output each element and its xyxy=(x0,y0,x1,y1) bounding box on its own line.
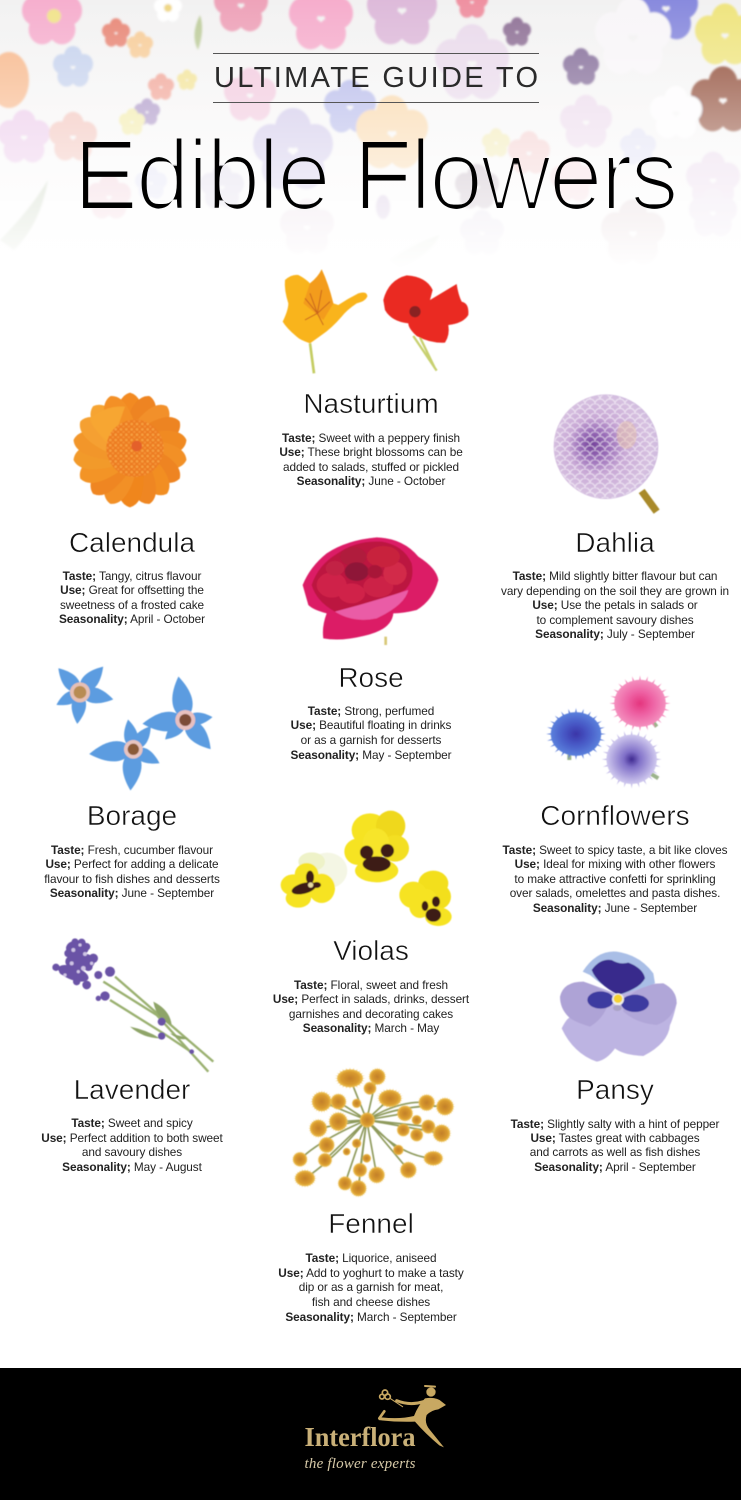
heading: borage: Borage xyxy=(87,800,177,831)
panel: calendula xyxy=(59,391,205,626)
text block: dahlia details: to complement savoury dishes xyxy=(536,613,694,627)
text block: lavender details: Use; Perfect addition to both sweet xyxy=(41,1131,224,1145)
text block: cornflowers details: to make attractive confetti for sprinkling xyxy=(514,872,716,886)
icon: cornflowers xyxy=(546,675,671,789)
text block: rose details: Seasonality; May - September xyxy=(290,748,452,762)
text block: rose details: Use; Beautiful floating in drinks xyxy=(291,718,452,732)
text block: lavender details xyxy=(41,1116,224,1174)
text block: nasturtium details: added to salads, stuffed or pickled xyxy=(283,460,459,474)
text block: dahlia details xyxy=(501,569,729,641)
heading: calendula: Calendula xyxy=(69,527,195,558)
panel: lavender xyxy=(41,938,224,1174)
text block: fennel details: Taste; Liquorice, aniseed xyxy=(306,1251,436,1265)
text block: fennel details: Seasonality; March - September xyxy=(285,1310,457,1324)
text block: dahlia details: Use; Use the petals in salads or xyxy=(532,598,698,612)
text block: lavender details: Taste; Sweet and spicy xyxy=(71,1116,193,1130)
panel: violas xyxy=(273,811,470,1035)
text block: lavender details: and savoury dishes xyxy=(82,1145,182,1159)
title: edible flowers: Edible Flowers xyxy=(73,120,679,230)
heading: cornflowers: Cornflowers xyxy=(540,800,690,831)
text block: fennel details: Use; Add to yoghurt to make a tasty xyxy=(278,1266,464,1280)
heading: lavender: Lavender xyxy=(74,1074,190,1105)
panel: nasturtium xyxy=(279,269,468,488)
text block: pansy details: Use; Tastes great with cabbages xyxy=(530,1131,700,1145)
text block: calendula details: Seasonality; April - October xyxy=(59,612,205,626)
text block: pansy details: Seasonality; April - September xyxy=(534,1160,696,1174)
panel: pansy xyxy=(511,952,720,1174)
logo: running figure with bouquet xyxy=(378,1386,446,1447)
heading: ultimate guide to: ULTIMATE GUIDE TO xyxy=(214,62,538,94)
heading: pansy: Pansy xyxy=(576,1074,654,1105)
text block: calendula details: Use; Great for offsetting the xyxy=(60,583,204,597)
icon: fennel flower head xyxy=(292,1067,455,1198)
text block: cornflowers details: Use; Ideal for mixing with other flowers xyxy=(515,857,716,871)
panel: dahlia xyxy=(501,394,729,641)
footer band xyxy=(0,1368,741,1500)
text block: calendula details: Taste; Tangy, citrus flavour xyxy=(63,569,202,583)
text block: violas details: Use; Perfect in salads, drinks, dessert xyxy=(273,992,470,1006)
text block: cornflowers details: Taste; Sweet to spicy taste, a bit like cloves xyxy=(503,843,728,857)
icon: nasturtium flowers xyxy=(283,269,468,373)
heading: dahlia: Dahlia xyxy=(575,527,655,558)
logo: tagline: the flower experts xyxy=(304,1456,416,1472)
icon: lavender sprigs xyxy=(52,938,213,1072)
panel: fennel xyxy=(278,1067,464,1324)
text block: violas details: Taste; Floral, sweet and fresh xyxy=(294,978,448,992)
panel: rose xyxy=(290,537,452,762)
icon: dahlia flower xyxy=(554,394,658,512)
title rule bottom xyxy=(213,102,539,103)
text block: calendula details: sweetness of a frosted cake xyxy=(60,598,205,612)
text block: fennel details: fish and cheese dishes xyxy=(312,1295,430,1309)
text block: lavender details: Seasonality; May - August xyxy=(62,1160,203,1174)
text block: nasturtium details: Taste; Sweet with a peppery finish xyxy=(282,431,460,445)
text block: nasturtium details xyxy=(279,431,463,488)
text block: borage details: Use; Perfect for adding a delicate xyxy=(45,857,219,871)
text block: calendula details xyxy=(59,569,205,626)
text block: borage details: flavour to fish dishes and desserts xyxy=(44,872,220,886)
heading: fennel: Fennel xyxy=(328,1208,414,1239)
icon: viola flowers xyxy=(281,811,452,926)
text block: borage details xyxy=(44,843,220,900)
text block: fennel details xyxy=(278,1251,464,1324)
text block: cornflowers details: Seasonality; June - September xyxy=(533,901,697,915)
logo: interflora wordmark: Interflora xyxy=(304,1422,416,1452)
header banner with pale flower background xyxy=(0,0,741,274)
text block: rose details: or as a garnish for desserts xyxy=(301,733,442,747)
icon: borage flowers xyxy=(53,661,217,791)
icon: pansy flower xyxy=(560,952,677,1062)
panel: borage xyxy=(44,661,220,900)
text block: dahlia details: Taste; Mild slightly bitter flavour but can xyxy=(513,569,717,583)
text block: pansy details xyxy=(511,1117,720,1174)
icon: calendula flower xyxy=(71,391,189,509)
text block: borage details: Taste; Fresh, cucumber flavour xyxy=(51,843,213,857)
text block: fennel details: dip or as a garnish for meat, xyxy=(299,1280,443,1294)
text block: nasturtium details: Use; These bright blossoms can be xyxy=(279,445,463,459)
text block: violas details: Seasonality; March - May xyxy=(303,1021,439,1035)
heading: rose: Rose xyxy=(338,662,404,693)
text block: pansy details: Taste; Slightly salty with a hint of pepper xyxy=(511,1117,720,1131)
heading: nasturtium: Nasturtium xyxy=(303,388,439,419)
text block: borage details: Seasonality; June - September xyxy=(50,886,214,900)
text block: rose details: Taste; Strong, perfumed xyxy=(308,704,434,718)
text block: cornflowers details: over salads, omelettes and pasta dishes. xyxy=(510,886,720,900)
text block: dahlia details: Seasonality; July - September xyxy=(535,627,695,641)
text block: rose details xyxy=(290,704,452,762)
icon: rose flower xyxy=(303,537,438,645)
text block: violas details xyxy=(273,978,470,1035)
heading: violas: Violas xyxy=(333,935,409,966)
text block: violas details: garnishes and decorating cakes xyxy=(289,1007,453,1021)
text block: pansy details: and carrots as well as fish dishes xyxy=(530,1145,700,1159)
text block: cornflowers details xyxy=(503,843,728,915)
title rule top xyxy=(213,53,539,54)
text block: dahlia details: vary depending on the soil they are grown in xyxy=(501,584,729,598)
panel: cornflowers xyxy=(503,675,728,915)
text block: nasturtium details: Seasonality; June - October xyxy=(297,474,445,488)
